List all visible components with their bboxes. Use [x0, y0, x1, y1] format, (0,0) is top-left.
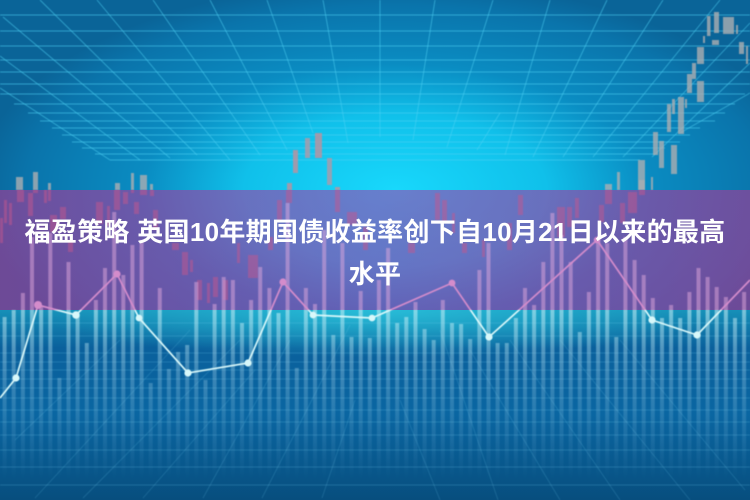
purple title band [0, 190, 750, 310]
title: 水平 [349, 259, 401, 289]
background: upper glow [0, 0, 750, 310]
title: 福盈策略 英国10年期国债收益率创下自10月21日以来的最高 [25, 217, 725, 247]
background: lower blue panel [0, 310, 750, 500]
bar chart: vertical bars [5, 203, 744, 490]
background: lower panel glow [0, 310, 750, 370]
title [25, 217, 725, 289]
perspective grid: upper [0, 0, 750, 160]
candlesticks: above the band [16, 12, 748, 190]
perspective grid: lower [0, 323, 750, 500]
line chart: trend line with markers [0, 237, 750, 398]
candlesticks: inside the band [0, 190, 645, 303]
